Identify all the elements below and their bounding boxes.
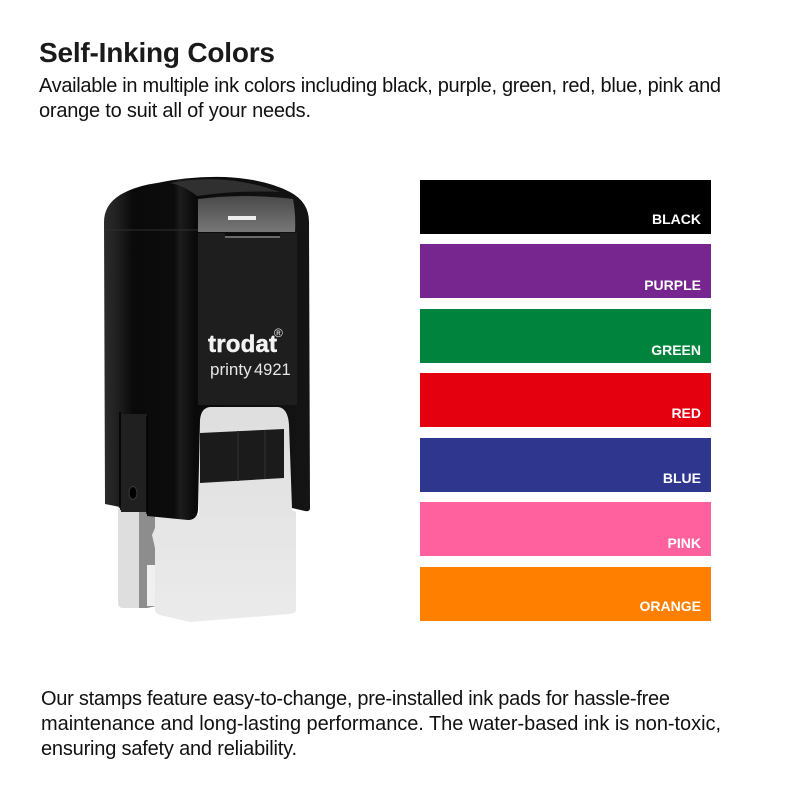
swatch: purple: PURPLE [644, 277, 701, 293]
intro text: orange to suit all of your needs. [39, 100, 311, 122]
bottom text: ensuring safety and reliability. [41, 738, 297, 760]
swatch: red: RED [671, 405, 701, 421]
intro text [39, 75, 721, 122]
title: Self-Inking Colors [39, 37, 275, 68]
swatch: pink: PINK [668, 535, 701, 551]
cap slit [228, 216, 256, 220]
trodat logo: trodat [208, 331, 277, 358]
bottom text: Our stamps feature easy-to-change, pre-installed ink pads for hassle-free [41, 688, 670, 710]
swatch: black: BLACK [652, 211, 701, 227]
swatch: orange [420, 567, 711, 621]
stamp illustration [104, 177, 310, 622]
swatch: pink [420, 502, 711, 556]
side latch [121, 414, 147, 512]
swatch: green: GREEN [651, 342, 701, 358]
intro text: Available in multiple ink colors including black, purple, green, red, blue, pink and [39, 75, 721, 97]
cap seam [225, 233, 280, 238]
swatch: blue [420, 438, 711, 492]
cap highlight [170, 179, 280, 196]
stamp base: left foot [118, 505, 157, 608]
stamp base: white front [152, 405, 296, 622]
stamp body [104, 177, 310, 520]
swatch: black [420, 180, 711, 234]
model label: 4921 [254, 361, 291, 379]
model label: printy [210, 360, 252, 379]
bottom text: maintenance and long-lasting performance. The water-based ink is non-toxic, [41, 713, 721, 735]
spring band [200, 429, 284, 483]
swatch: green [420, 309, 711, 363]
swatch: orange: ORANGE [640, 598, 701, 614]
swatch: blue: BLUE [663, 470, 701, 486]
swatch: red [420, 373, 711, 427]
bottom text [41, 688, 721, 760]
swatch: purple [420, 244, 711, 298]
front panel [198, 233, 297, 405]
registered mark: ® [274, 326, 283, 340]
cap window [198, 196, 295, 232]
